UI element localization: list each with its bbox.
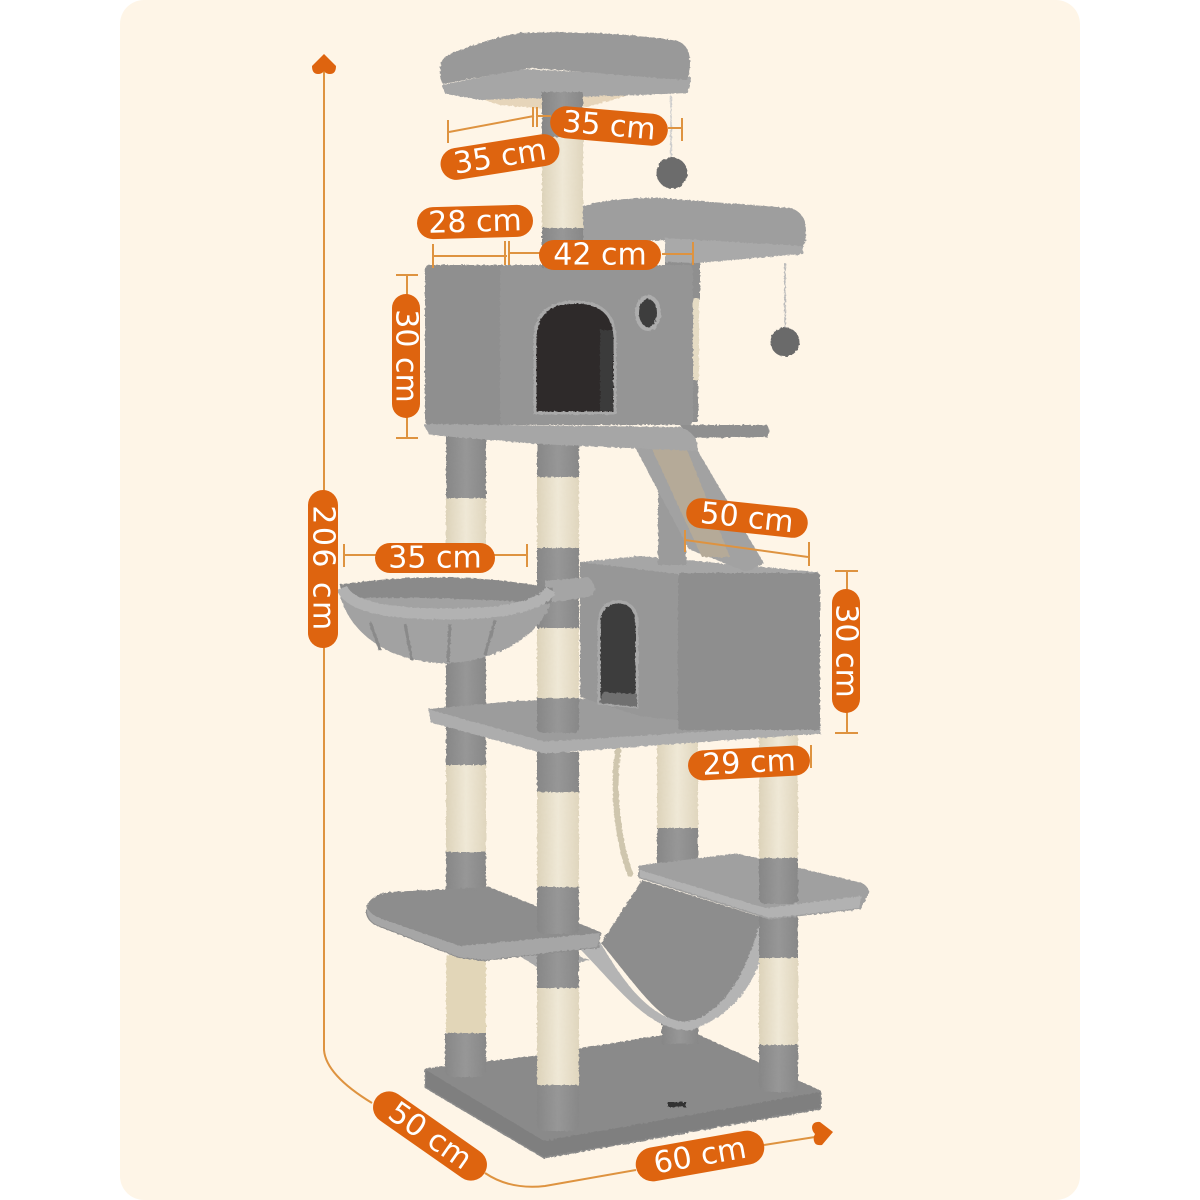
front post lower section xyxy=(537,945,579,1131)
middle shelf xyxy=(429,698,820,753)
label: 35 cm left: 35 cm xyxy=(451,132,549,182)
top post xyxy=(542,92,583,268)
label: 60 cm base width: 60 cm xyxy=(651,1131,749,1181)
label: 50 cm ramp: 50 cm xyxy=(699,496,795,540)
icon: top heart xyxy=(312,54,336,74)
label: 50 cm base depth xyxy=(366,1084,494,1188)
base board xyxy=(426,1035,820,1157)
label: 35 cm basket: 35 cm xyxy=(388,540,482,576)
icon: right heart xyxy=(812,1122,833,1145)
lower left shelf xyxy=(367,888,600,960)
label: 60 cm base width xyxy=(633,1127,767,1185)
background panel xyxy=(120,0,1080,1200)
label: 30 cm upper house: 30 cm xyxy=(388,309,424,403)
label: 50 cm base depth: 50 cm xyxy=(382,1095,478,1177)
lower right shelf xyxy=(640,855,867,918)
second perch xyxy=(583,198,806,263)
cat tree xyxy=(339,32,867,1157)
label: 29 cm: 29 cm xyxy=(701,743,797,783)
upper house xyxy=(425,265,693,425)
dimension lines xyxy=(344,107,858,768)
label: 35 cm right: 35 cm xyxy=(561,104,657,148)
right front post lower xyxy=(759,915,798,1092)
pompom toy upper xyxy=(656,96,688,188)
post under upper perch xyxy=(665,250,700,422)
total height dimension line xyxy=(324,70,815,1187)
right front post upper xyxy=(759,735,798,904)
back right post xyxy=(657,742,698,1044)
rope xyxy=(616,750,630,874)
front post segment above middle shelf xyxy=(537,698,579,733)
ramp post xyxy=(658,470,686,565)
hanging basket xyxy=(339,577,595,663)
upper shelf xyxy=(425,425,769,450)
lower house xyxy=(580,556,820,730)
hammock xyxy=(518,880,768,1030)
pompom toy lower xyxy=(770,263,800,356)
label: 28 cm: 28 cm xyxy=(428,203,522,241)
ramp xyxy=(634,432,762,570)
front post upper section xyxy=(537,442,579,934)
back left post xyxy=(445,435,486,1077)
top perch xyxy=(440,32,690,110)
label: 30 cm lower house: 30 cm xyxy=(828,604,864,698)
label: 42 cm: 42 cm xyxy=(553,238,647,272)
label: 206 cm: 206 cm xyxy=(306,505,340,633)
